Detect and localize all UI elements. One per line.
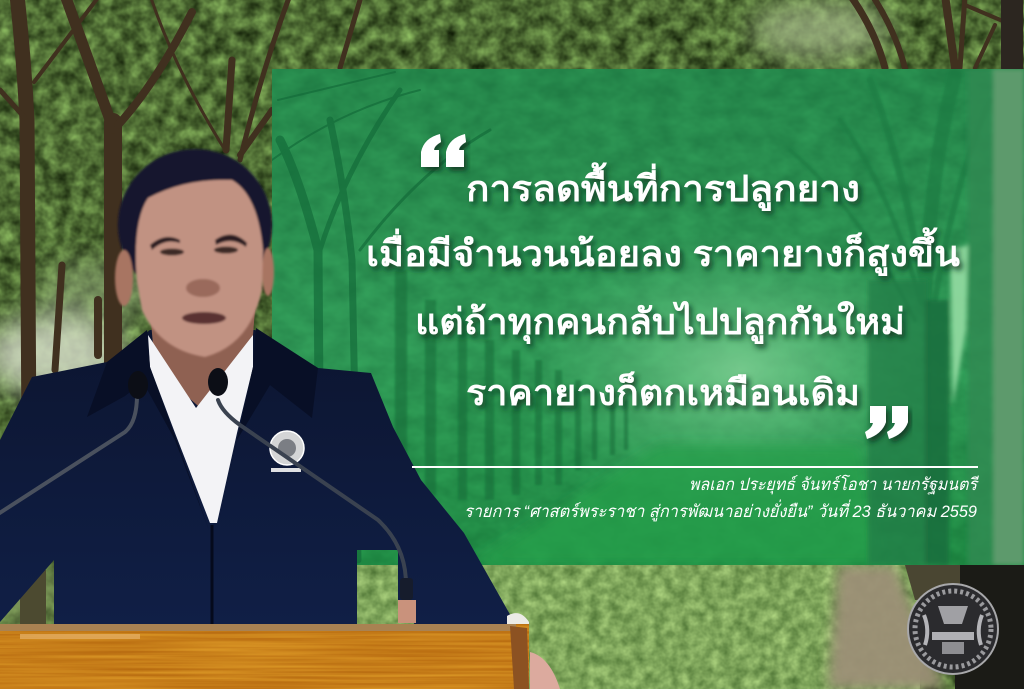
hand <box>530 652 560 689</box>
left microphone <box>0 371 148 514</box>
face <box>136 180 263 357</box>
panel trees top left <box>272 72 490 560</box>
nose <box>186 279 220 297</box>
quote text: เมื่อมีจำนวนน้อยลง ราคายางก็สูงขึ้น <box>366 227 960 276</box>
right dark tree base <box>955 565 1024 689</box>
ground: grass <box>340 560 920 689</box>
pale distance behind trunks <box>0 0 890 620</box>
panel: green quote overlay <box>272 69 1024 565</box>
jacket emblem <box>270 431 304 472</box>
panel right trunks <box>868 69 1024 565</box>
brows <box>150 235 247 250</box>
collar: right <box>217 328 318 530</box>
attribution divider <box>412 466 978 468</box>
shirt <box>148 335 253 523</box>
collar: left <box>87 330 209 530</box>
quote text: การลดพื้นที่การปลูกยาง <box>466 162 860 211</box>
hair <box>118 149 272 301</box>
quote text: แต่ถ้าทุกคนกลับไปปลูกกันใหม่ <box>415 301 905 344</box>
mouth <box>182 312 226 324</box>
neck <box>150 310 255 412</box>
eyes <box>160 248 184 256</box>
quote text: ราคายางก็ตกเหมือนเดิม <box>466 370 860 413</box>
attribution text: รายการ “ศาสตร์พระราชา สู่การพัฒนาอย่างยั่งยืน” วันที่ 23 ธันวาคม 2559 <box>464 499 978 522</box>
attribution text <box>464 474 980 522</box>
attribution text: พลเอก ประยุทธ์ จันทร์โอชา นายกรัฐมนตรี <box>689 474 980 495</box>
head <box>115 149 274 357</box>
panel right fronds <box>791 78 969 301</box>
left ear <box>115 250 133 306</box>
lower left trunk <box>20 570 46 630</box>
opening quotation mark <box>421 134 466 167</box>
lectern <box>0 624 529 689</box>
cuff <box>507 613 529 632</box>
right ear <box>262 248 274 296</box>
jacket <box>0 330 512 625</box>
closing quotation mark <box>865 406 908 439</box>
zipper <box>210 525 214 625</box>
tree trunks and branches <box>0 0 1012 440</box>
right microphone <box>208 368 416 623</box>
ground: dirt path <box>828 565 945 689</box>
quote text <box>366 162 960 413</box>
panel ground <box>470 445 880 565</box>
panel glow <box>562 258 870 460</box>
seal emblem <box>908 584 998 674</box>
figure: speaker <box>0 149 560 689</box>
panel tree rows <box>395 270 628 500</box>
